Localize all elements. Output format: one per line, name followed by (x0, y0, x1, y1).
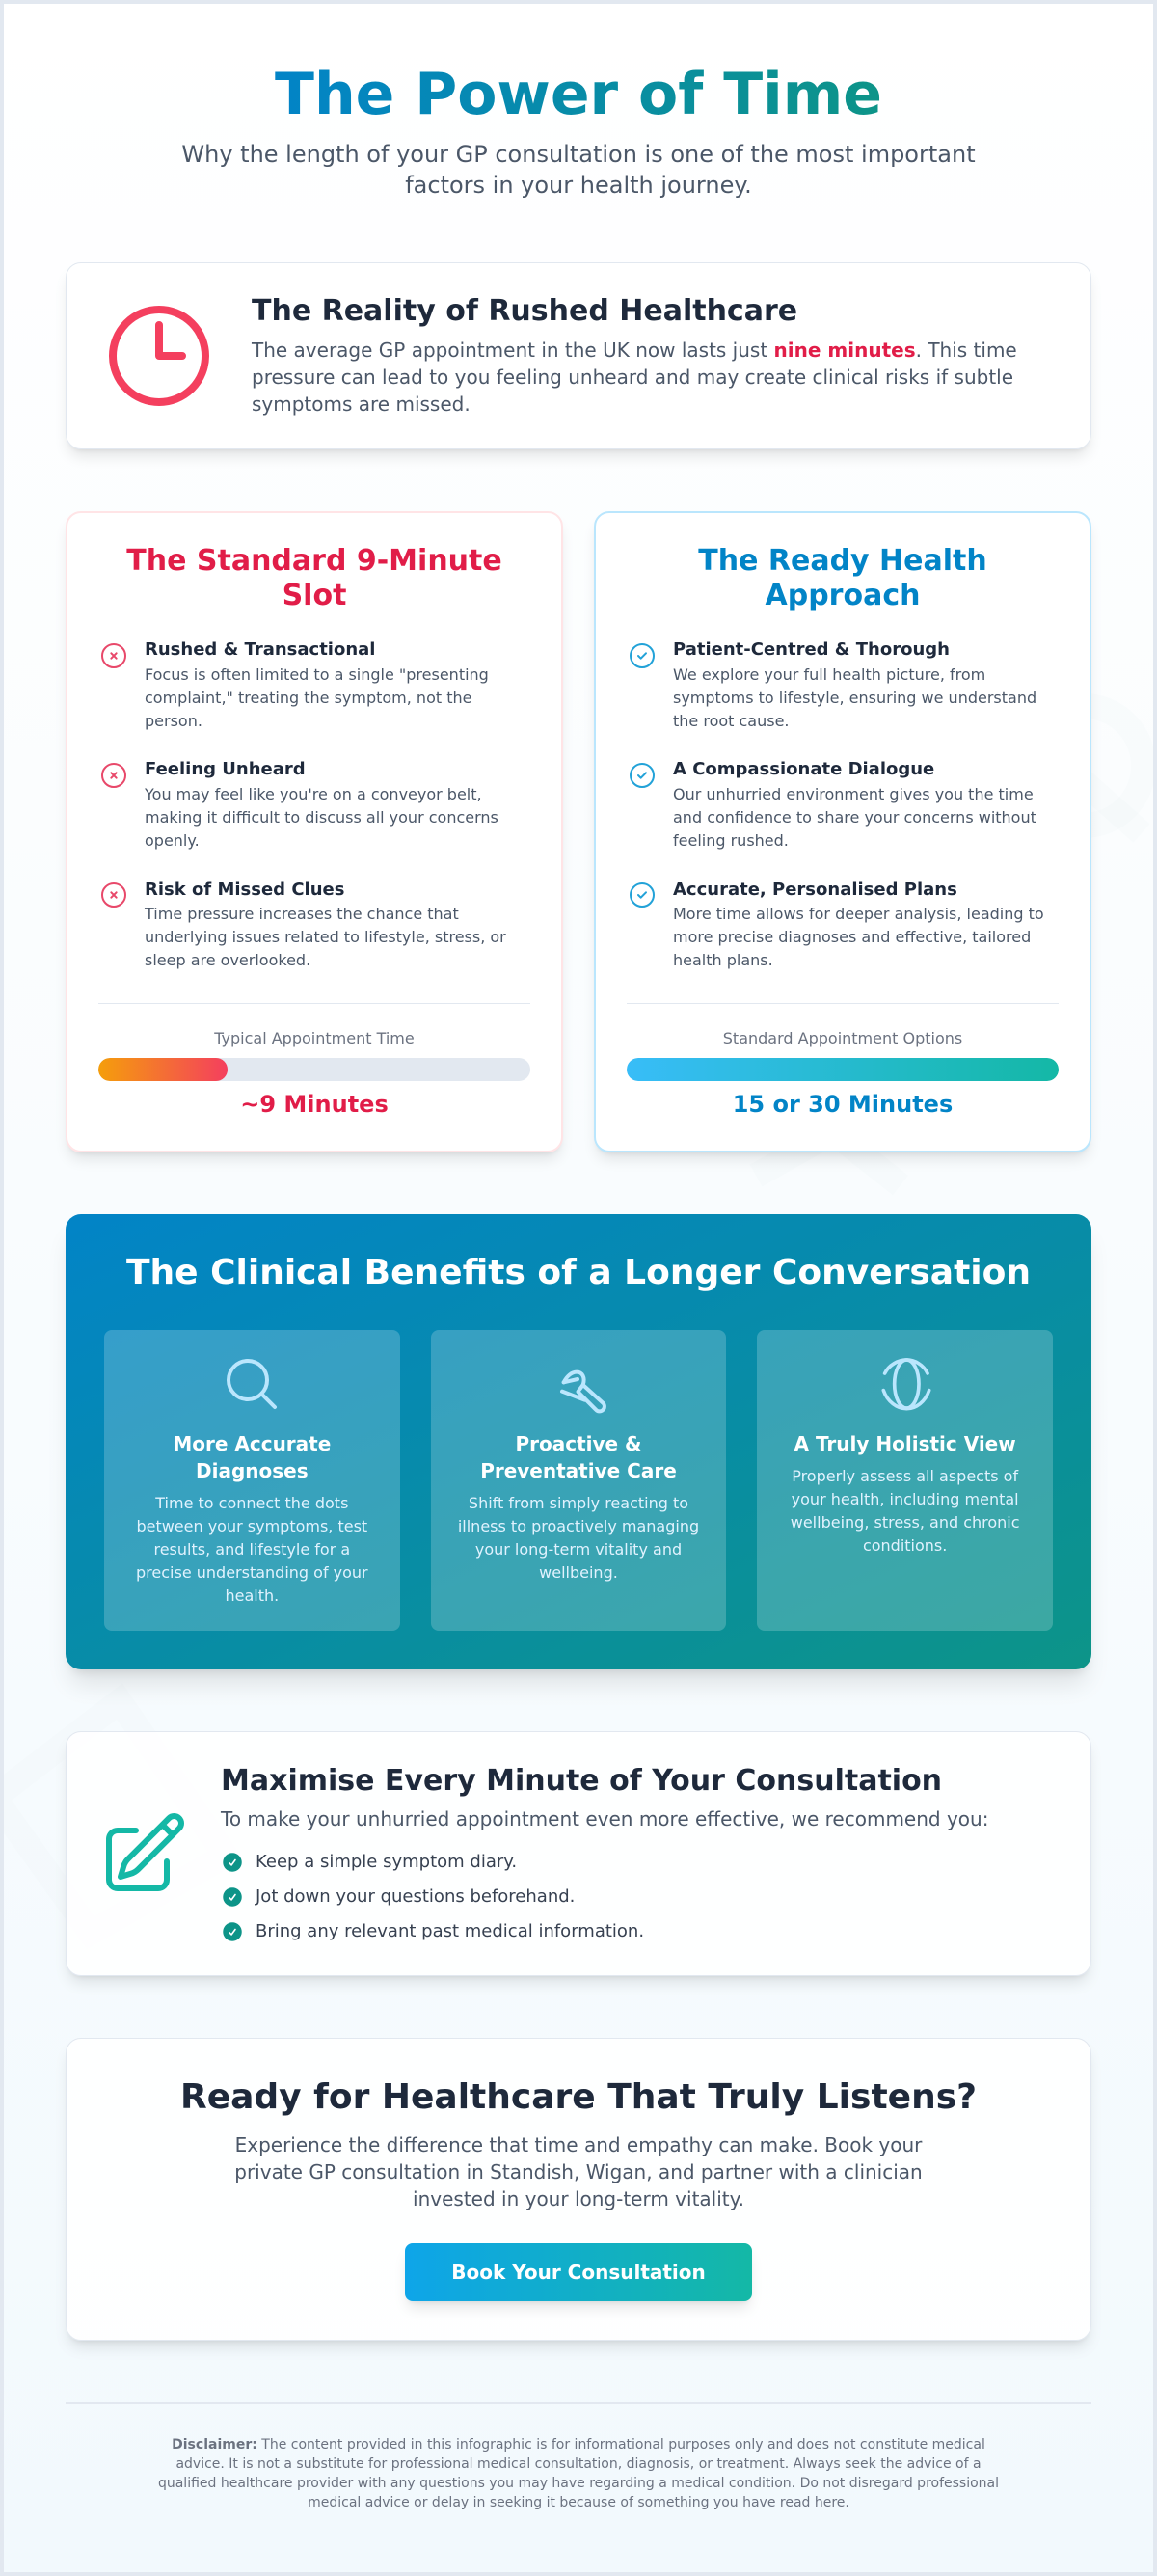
item text: A Compassionate Dialogue (673, 759, 934, 779)
benefit cards (104, 1330, 1053, 1631)
icon: check (630, 763, 655, 788)
tips checklist (223, 1852, 644, 1941)
card text: your health, including mental (792, 1490, 1019, 1508)
paragraph (251, 339, 1017, 416)
item text (145, 759, 498, 850)
item text: person. (145, 712, 202, 730)
tip: past medical information: Bring any relevant past medical information. (256, 1921, 644, 1941)
card: more accurate diagnoses (104, 1330, 400, 1631)
subtitle: Why the length of your GP consultation is one of the most important (181, 141, 976, 168)
card heading: Preventative Care (480, 1459, 677, 1482)
progress bar (98, 1058, 530, 1081)
list item: personalised plans (630, 880, 1044, 969)
subtitle (181, 141, 976, 199)
item text: Time pressure increases the chance that (145, 905, 459, 923)
item text: underlying issues related to lifestyle, stress, or (145, 928, 506, 946)
comparison columns (65, 511, 1092, 1162)
header (181, 61, 976, 199)
heading: The Reality of Rushed Healthcare (252, 294, 797, 328)
list item: patient-centred (630, 639, 1036, 730)
item text (145, 880, 506, 969)
icon: cross (101, 643, 126, 668)
icon: wrench (559, 1369, 606, 1414)
tips text block (220, 1764, 988, 1941)
icon: globe (881, 1358, 931, 1410)
card: a truly holistic view (757, 1330, 1053, 1631)
list item: compassionate dialogue (630, 759, 1036, 850)
panel: standard 9-minute slot (66, 511, 563, 1152)
appointment options meter (627, 1003, 1059, 1120)
heading: Ready for Healthcare That Truly Listens? (180, 2077, 977, 2117)
item text: We explore your full health picture, from (673, 665, 985, 684)
panel: the reality of rushed healthcare (66, 262, 1091, 449)
card heading: Proactive & (515, 1432, 642, 1455)
item text: Risk of Missed Clues (145, 880, 344, 900)
column heading (698, 544, 987, 612)
item text (673, 639, 1036, 730)
card text: wellbeing. (539, 1563, 618, 1582)
item text: and confidence to share your concerns without (673, 808, 1036, 827)
intro: To make your unhurried appointment even more effective, we recommend you: (221, 1807, 988, 1830)
subtitle: factors in your health journey. (405, 172, 752, 199)
card text: between your symptoms, test (136, 1517, 367, 1535)
panel heading: The Clinical Benefits of a Longer Conversation (126, 1253, 1031, 1292)
card heading (173, 1432, 331, 1482)
item text: Rushed & Transactional (145, 639, 375, 660)
card text: wellbeing, stress, and chronic (791, 1513, 1020, 1532)
footer disclaimer: Disclaimer: The content provided in this infographic is for informational purposes only and does not constitute medical (172, 2437, 985, 2453)
title: The Power of Time (275, 61, 882, 128)
paragraph: The average GP appointment in the UK now lasts just nine minutes. This time (252, 339, 1017, 362)
item text: More time allows for deeper analysis, leading to (673, 905, 1044, 923)
paragraph: Experience the difference that time and empathy can make. Book your (235, 2133, 922, 2156)
card text (136, 1494, 368, 1605)
icon: check (630, 643, 655, 668)
card heading: Diagnoses (196, 1459, 309, 1482)
tip: questions: Jot down your questions beforehand. (256, 1886, 575, 1907)
card text (791, 1467, 1020, 1555)
icon: cross (101, 763, 126, 788)
item text: the root cause. (673, 712, 790, 730)
button: Book Your Consultation (451, 2261, 706, 2284)
icon: check (630, 882, 655, 908)
footer disclaimer: medical advice or delay in seeking it because of something you have read here. (308, 2495, 849, 2510)
card text: conditions. (863, 1536, 947, 1555)
button (405, 2243, 752, 2301)
item text (673, 759, 1036, 850)
item text: Feeling Unheard (145, 759, 306, 779)
footer disclaimer: advice. It is not a substitute for professional medical consultation, diagnosis, or treatment. Always seek the advice of a (175, 2456, 982, 2472)
footer disclaimer: qualified healthcare provider with any questions you may have regarding a medical condition. Do not disregard professional (158, 2476, 999, 2491)
list item: rushed and transactional (101, 639, 489, 730)
progress bar (627, 1058, 1059, 1081)
card: proactive and preventative care (431, 1330, 726, 1631)
panel: the ready health approach (594, 511, 1091, 1152)
card heading: More Accurate (173, 1432, 331, 1455)
item text: Focus is often limited to a single "presenting (145, 665, 489, 684)
item text: complaint," treating the symptom, not the (145, 689, 471, 707)
icon: magnifying glass (227, 1359, 278, 1410)
item text: health plans. (673, 951, 773, 969)
paragraph: symptoms are missed. (252, 393, 471, 416)
tip: symptom diary: Keep a simple symptom diary. (256, 1852, 517, 1872)
card text: Shift from simply reacting to (469, 1494, 688, 1512)
paragraph: private GP consultation in Standish, Wigan, and partner with a clinician (234, 2160, 923, 2183)
column heading: Approach (766, 579, 920, 612)
list item: risk of missed clues (101, 880, 506, 969)
column heading: Slot (283, 579, 346, 612)
card text: Properly assess all aspects of (792, 1467, 1018, 1485)
column heading: The Ready Health (698, 544, 987, 578)
item text (673, 880, 1044, 969)
panel: call to action (66, 2038, 1091, 2341)
item text: openly. (145, 831, 200, 850)
icon: cross (101, 882, 126, 908)
item text: sleep are overlooked. (145, 951, 310, 969)
item text: feeling rushed. (673, 831, 789, 850)
column heading: The Standard 9-Minute (126, 544, 502, 578)
card text: your long-term vitality and (475, 1540, 682, 1559)
paragraph: invested in your long-term vitality. (413, 2187, 744, 2210)
card text: precise understanding of your (136, 1563, 368, 1582)
meter value: 15 or 30 Minutes (733, 1091, 953, 1118)
column heading (126, 544, 502, 612)
panel: clinical benefits (66, 1214, 1091, 1669)
item text: symptoms to lifestyle, ensuring we understand (673, 689, 1036, 707)
icon: clock (109, 306, 209, 406)
tip: past medical information (221, 1918, 988, 1945)
card text: Time to connect the dots (155, 1494, 348, 1512)
item text: You may feel like you're on a conveyor belt, (145, 785, 482, 803)
meter label: Standard Appointment Options (723, 1029, 962, 1047)
item text: more precise diagnoses and effective, tailored (673, 928, 1031, 946)
item text: Our unhurried environment gives you the time (673, 785, 1034, 803)
card text (458, 1494, 699, 1582)
item text: Accurate, Personalised Plans (673, 880, 957, 900)
meter label: Typical Appointment Time (214, 1029, 415, 1047)
card heading: A Truly Holistic View (794, 1432, 1016, 1455)
card text: illness to proactively managing (458, 1517, 699, 1535)
appointment time meter (98, 1003, 530, 1120)
item text (145, 639, 489, 730)
reality text block (251, 294, 1017, 416)
meter value: ~9 Minutes (240, 1091, 389, 1118)
card heading (480, 1432, 677, 1482)
panel: maximise every minute (66, 1731, 1091, 1976)
list item: feeling unheard (101, 759, 498, 850)
icon: pencil and square (106, 1813, 184, 1891)
paragraph: pressure can lead to you feeling unheard and may create clinical risks if subtle (252, 366, 1013, 389)
card text: health. (225, 1586, 279, 1605)
item text: making it difficult to discuss all your concerns (145, 808, 498, 827)
card text: results, and lifestyle for a (153, 1540, 350, 1559)
footer disclaimer (66, 2402, 1091, 2512)
paragraph (105, 2131, 1052, 2212)
item text: Patient-Centred & Thorough (673, 639, 950, 660)
heading: Maximise Every Minute of Your Consultation (221, 1764, 942, 1798)
